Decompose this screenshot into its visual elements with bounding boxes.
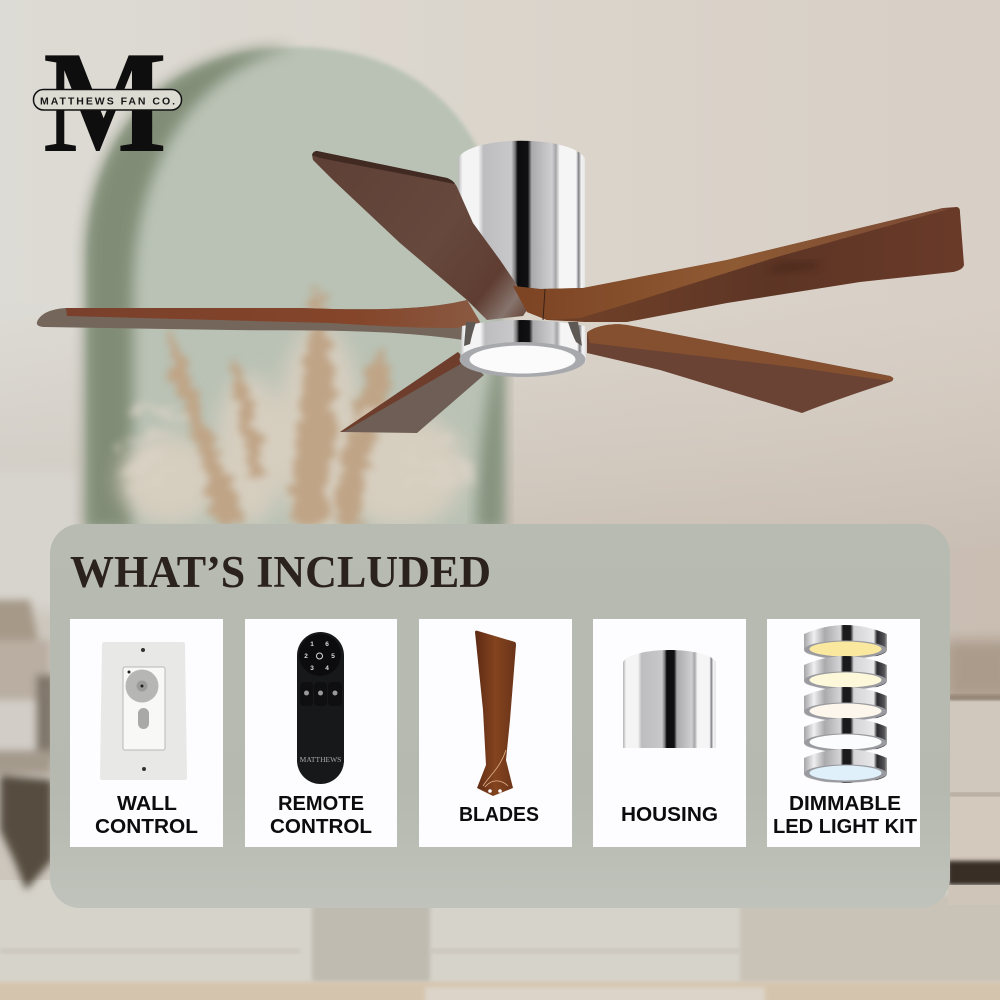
panel: what's included [50,524,950,908]
fan blade: top left [312,151,527,320]
heading: WHAT’S INCLUDED [70,547,491,597]
icon: remote control [297,632,344,784]
background: sofa right [945,640,1000,905]
label: DIMMABLE [789,792,901,815]
logo: Matthews Fan Co.: MATTHEWS FAN CO. [40,96,175,108]
card: remote control [245,619,397,847]
card: wall control [70,619,223,847]
background: sofa and plant left [0,600,54,890]
fan blade: front left [340,352,484,433]
fan blade: rear right [587,324,893,413]
icon: remote control: 5 [331,653,335,660]
icon: remote control: MATTHEWS [300,755,341,764]
card: housing [593,619,746,847]
fan housing [458,141,585,290]
fan: ceiling fan with five wood blades [37,141,964,433]
icon: housing [623,650,716,748]
card: blades [419,619,572,847]
label: CONTROL [270,815,372,838]
background: green arch [85,47,505,535]
label: BLADES [459,803,539,826]
icon: remote control: 2 [304,653,308,660]
label: HOUSING [621,803,718,826]
icon: remote control: 6 [325,641,329,648]
label: REMOTE [278,792,364,815]
label: LED LIGHT KIT [773,815,917,838]
logo: Matthews Fan Co.: M [43,21,167,183]
icon: blade [475,631,516,796]
icon: remote control: 4 [325,665,329,672]
label: WALL [117,792,177,815]
icon: wall control [100,642,187,780]
fan blade: far left [37,300,480,340]
icon: remote control: 3 [310,665,314,672]
icon: remote control: 1 [310,641,314,648]
icon: led light kit stack [804,625,887,783]
fan light kit [460,320,586,377]
background: floor [0,880,1000,1000]
label: CONTROL [95,815,198,838]
fan blade: right [513,207,964,322]
background: pampas grass [120,285,470,535]
card: dimmable led light kit [767,619,920,847]
